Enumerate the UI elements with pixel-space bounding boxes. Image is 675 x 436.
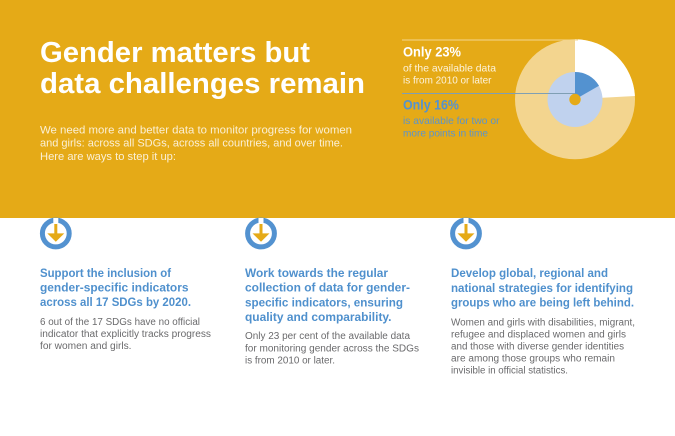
body text 2: is from 2010 or later. xyxy=(245,355,335,366)
pie chart xyxy=(515,39,635,159)
callout: 16 per cent: is available for two or xyxy=(403,115,500,127)
intro text: We need more and better data to monitor progress for women xyxy=(40,124,352,136)
heading 3: groups who are being left behind. xyxy=(451,298,634,310)
heading 1: gender-specific indicators xyxy=(40,283,188,295)
body text 1: for women and girls. xyxy=(40,341,132,352)
column 2 xyxy=(245,268,419,366)
heading 3: national strategies for identifying xyxy=(451,283,633,295)
body text 3: invisible in official statistics. xyxy=(451,365,568,376)
heading 3: Develop global, regional and xyxy=(451,268,608,280)
heading 2 xyxy=(245,268,410,324)
heading 2: specific indicators, ensuring xyxy=(245,298,403,310)
icon: down arrow 2 xyxy=(248,218,274,247)
heading 1 xyxy=(40,268,191,309)
heading 1: across all 17 SDGs by 2020. xyxy=(40,297,191,309)
heading 1: Support the inclusion of xyxy=(40,268,171,280)
callout: 16 per cent xyxy=(402,93,575,140)
icon: down arrow 1 xyxy=(42,218,69,247)
callout: 23 per cent xyxy=(402,40,578,86)
header band xyxy=(0,0,675,218)
callout: 16 per cent: Only 16% xyxy=(403,96,459,112)
body text 1 xyxy=(40,317,211,352)
icon: down arrow 3 xyxy=(453,218,479,247)
body text 3: and those with diverse gender identities xyxy=(451,341,624,352)
body text 3 xyxy=(451,318,635,376)
intro text xyxy=(40,124,352,163)
callout: 23 per cent: is from 2010 or later xyxy=(403,74,492,86)
body text 2: for monitoring gender across the SDGs xyxy=(245,344,419,354)
callout: 23 per cent: of the available data xyxy=(403,63,496,75)
heading 2: quality and comparability. xyxy=(245,312,392,324)
intro text: Here are ways to step it up: xyxy=(40,151,176,163)
title: Gender matters but xyxy=(40,37,311,69)
body text 2 xyxy=(245,331,419,366)
body text 3: refugee and displaced women and girls xyxy=(451,329,626,340)
body text 3: are among those groups who remain xyxy=(451,354,615,364)
body text 2: Only 23 per cent of the available data xyxy=(245,331,410,342)
title xyxy=(40,37,365,100)
body text 3: Women and girls with disabilities, migrant, xyxy=(451,318,635,328)
body text 1: indicator that explicitly tracks progress xyxy=(40,329,211,340)
intro text: and girls: across all SDGs, across all countries, and over time. xyxy=(40,138,343,150)
callout: 23 per cent: Only 23% xyxy=(403,44,462,60)
heading 2: collection of data for gender- xyxy=(245,283,410,295)
title: data challenges remain xyxy=(40,68,365,100)
heading 3 xyxy=(451,268,634,310)
callout: 16 per cent: more points in time xyxy=(403,128,488,140)
heading 2: Work towards the regular xyxy=(245,268,389,280)
body text 1: 6 out of the 17 SDGs have no official xyxy=(40,317,200,328)
column 1 xyxy=(40,268,211,352)
column 3 xyxy=(451,268,635,376)
